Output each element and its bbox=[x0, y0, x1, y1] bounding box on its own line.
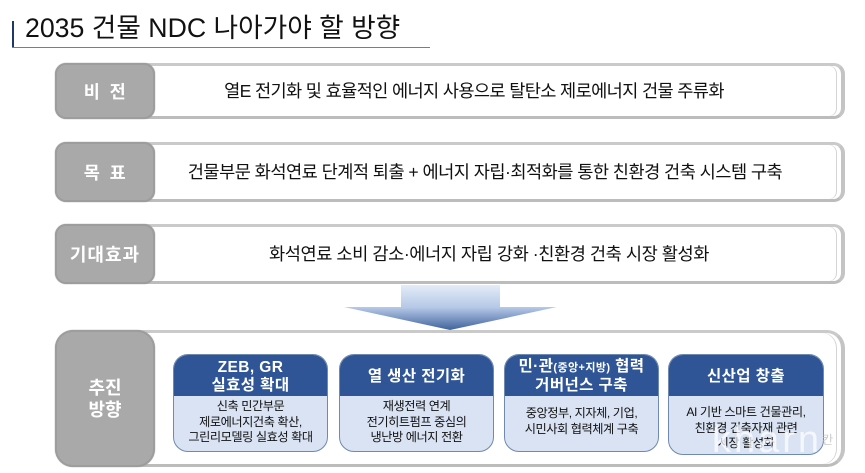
vision label: 비 전 bbox=[84, 82, 128, 102]
card text: 시장 활성화 bbox=[718, 436, 774, 450]
card text: AI 기반 스마트 건물관리, bbox=[686, 405, 806, 419]
card text bbox=[188, 399, 313, 444]
card: governance bbox=[504, 354, 659, 452]
card heading: 열 생산 전기화 bbox=[368, 368, 465, 384]
card text: 시민사회 협력체계 구축 bbox=[525, 422, 638, 436]
expected effects label bbox=[55, 224, 155, 284]
goal label bbox=[55, 142, 155, 202]
card text: 중앙정부, 지자체, 기업, bbox=[526, 406, 637, 420]
card: ZEB, GR bbox=[173, 354, 328, 452]
expected effects text: 화석연료 소비 감소·에너지 자립 강화 ·친환경 건축 시장 활성화 bbox=[269, 244, 709, 264]
card heading bbox=[173, 354, 328, 396]
card text: 친환경 건축자재 관련 bbox=[695, 420, 797, 434]
strategy label: 방향 bbox=[88, 400, 122, 420]
card text: 그린리모델링 실효성 확대 bbox=[188, 430, 313, 444]
card text: 냉난방 에너지 전환 bbox=[370, 430, 462, 444]
card heading: 거버넌스 구축 bbox=[535, 377, 628, 394]
panel: strategy frame bbox=[55, 330, 845, 467]
card heading: 신산업 창출 bbox=[707, 368, 785, 384]
title accent bar bbox=[12, 21, 14, 48]
card: heat electrification bbox=[339, 354, 494, 452]
card text bbox=[686, 405, 806, 450]
card text bbox=[367, 399, 466, 444]
panel: expected effects frame bbox=[55, 224, 845, 284]
vision text: 열E 전기화 및 효율적인 에너지 사용으로 탈탄소 제로에너지 건물 주류화 bbox=[224, 81, 724, 101]
watermark: kharn칸 bbox=[712, 419, 833, 461]
card heading: 민·관(중앙+지방) 협력 bbox=[519, 358, 644, 375]
title underline bbox=[12, 47, 430, 48]
card heading bbox=[668, 354, 824, 396]
card text: 신축 민간부문 bbox=[217, 399, 284, 413]
card heading: 실효성 확대 bbox=[211, 376, 290, 394]
card text bbox=[525, 406, 638, 436]
card text: 전기히트펌프 중심의 bbox=[367, 414, 466, 428]
strategy label bbox=[55, 330, 155, 467]
goal text: 건물부문 화석연료 단계적 퇴출 + 에너지 자립·최적화를 통한 친환경 건축 시스템 구축 bbox=[188, 162, 782, 182]
title: 2035 건물 NDC 나아가야 할 방향 bbox=[25, 13, 400, 43]
card text: 제로에너지건축 확산, bbox=[199, 414, 302, 428]
strategy label: 추진 bbox=[88, 378, 122, 398]
card heading bbox=[504, 354, 659, 396]
expected effects label: 기대효과 bbox=[70, 245, 140, 265]
panel: goal frame bbox=[55, 142, 845, 202]
panel: vision frame bbox=[55, 63, 845, 119]
card heading bbox=[339, 354, 494, 396]
vision label bbox=[55, 63, 155, 119]
goal label: 목 표 bbox=[84, 162, 128, 182]
card heading: ZEB, GR bbox=[218, 358, 283, 376]
card: new industry bbox=[668, 354, 824, 455]
card text: 재생전력 연계 bbox=[383, 399, 450, 413]
arrow: down bbox=[344, 285, 556, 330]
